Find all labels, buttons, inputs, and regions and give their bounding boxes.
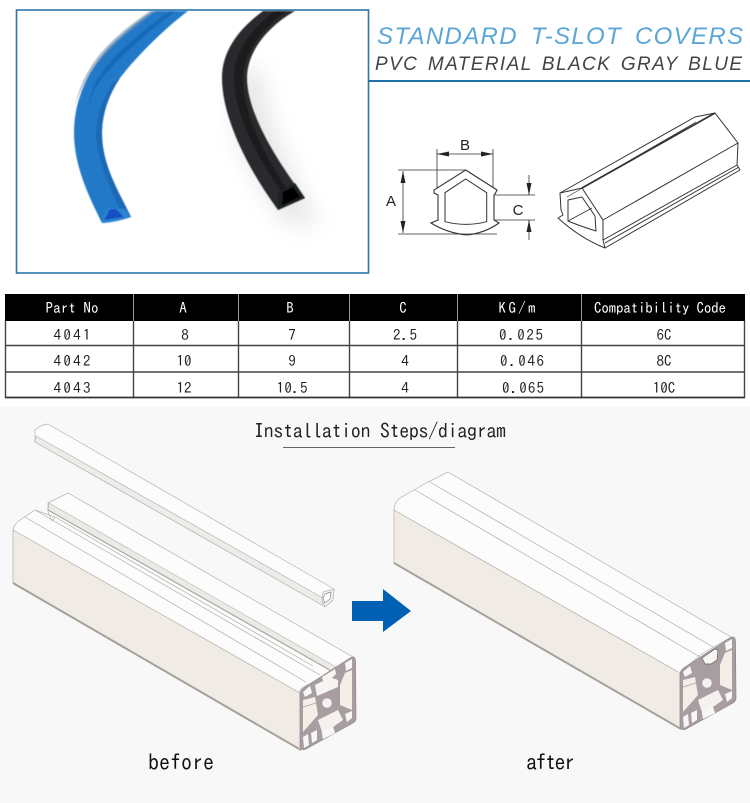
table row 4043: 10C [653, 380, 675, 395]
table header row: Part No [46, 300, 98, 315]
top faces [394, 472, 731, 673]
icon: arrow from before to after [352, 589, 411, 632]
table row 4042 [54, 353, 672, 368]
table row 4043: 10.5 [276, 380, 308, 395]
bottom slot [698, 690, 723, 719]
dimension lines [398, 149, 535, 240]
subheading: pvc material colours: PVC MATERIAL BLACK GRAY BLUE [375, 54, 742, 75]
bottom slot [318, 710, 343, 739]
top slot [315, 669, 338, 696]
aluminium end face [680, 637, 736, 730]
beige side face [394, 510, 681, 729]
table row 4041: 6C [656, 327, 672, 342]
label: after: after [526, 751, 575, 773]
corner chambers [303, 686, 312, 697]
table row 4042: 4 [401, 353, 409, 368]
heading underline [283, 447, 455, 448]
table row 4042: 4042 [54, 353, 90, 368]
table row 4043: 4 [401, 380, 409, 395]
illustration: after profile with slot covered [394, 472, 736, 730]
icon: blue PVC cover strip [74, 11, 188, 223]
table row 4043 [54, 380, 675, 395]
table row 4041: 7 [288, 327, 296, 342]
dimension label B: B [460, 137, 470, 154]
illustration: before profile with open slot [13, 493, 356, 750]
table row 4041: 4041 [54, 327, 90, 342]
table row 4043: 4043 [54, 380, 90, 395]
table row 4041: 8 [181, 327, 189, 342]
table row 4041 [54, 327, 672, 342]
covered top slot [702, 649, 718, 664]
table header row: C [399, 300, 407, 315]
aluminium end face [300, 657, 356, 750]
illustration: loose slot cover rail [35, 424, 334, 607]
table row 4041: 0.025 [499, 327, 543, 342]
panel: product photo of blue and black covers [16, 10, 368, 273]
dimension label C: C [513, 202, 524, 219]
diagram: 3D view of the cover [558, 113, 740, 248]
table row 4042: 9 [288, 353, 296, 368]
table header row: KG/m [498, 300, 536, 315]
table row 4042: 0.046 [500, 353, 544, 368]
table header row: A [179, 300, 187, 315]
slot walls and edge lines [25, 510, 320, 682]
left slot [303, 697, 318, 732]
table row 4043: 0.065 [502, 380, 544, 395]
corner chambers [683, 666, 692, 677]
table: part specifications [5, 294, 745, 398]
heading: standard t-slot covers: STANDARD T-SLOT COVERS [377, 23, 743, 50]
icon: black PVC cover strip [222, 11, 305, 210]
diagram: cross-section with dimensions [398, 149, 535, 240]
heading: installation steps: Installation Steps/diagram [254, 421, 506, 441]
panel: installation section background [0, 407, 750, 803]
top faces [13, 493, 353, 693]
table row 4042: 8C [656, 353, 672, 368]
table header row: Compatibility Code [594, 300, 726, 315]
label: before: before [148, 751, 214, 773]
right slot [340, 670, 352, 710]
table header row: B [286, 300, 294, 315]
left slot [683, 677, 698, 712]
beige side face [13, 530, 301, 750]
table row 4041: 2.5 [393, 327, 417, 342]
table header row [5, 294, 745, 321]
right slot [720, 650, 732, 690]
connector rule under the heading [368, 80, 750, 82]
soft shadow beneath the black cover [234, 70, 318, 225]
ridge lines [415, 482, 713, 657]
table row 4043: 12 [176, 380, 192, 395]
dimension label A: A [386, 193, 396, 210]
table row 4042: 10 [176, 353, 192, 368]
